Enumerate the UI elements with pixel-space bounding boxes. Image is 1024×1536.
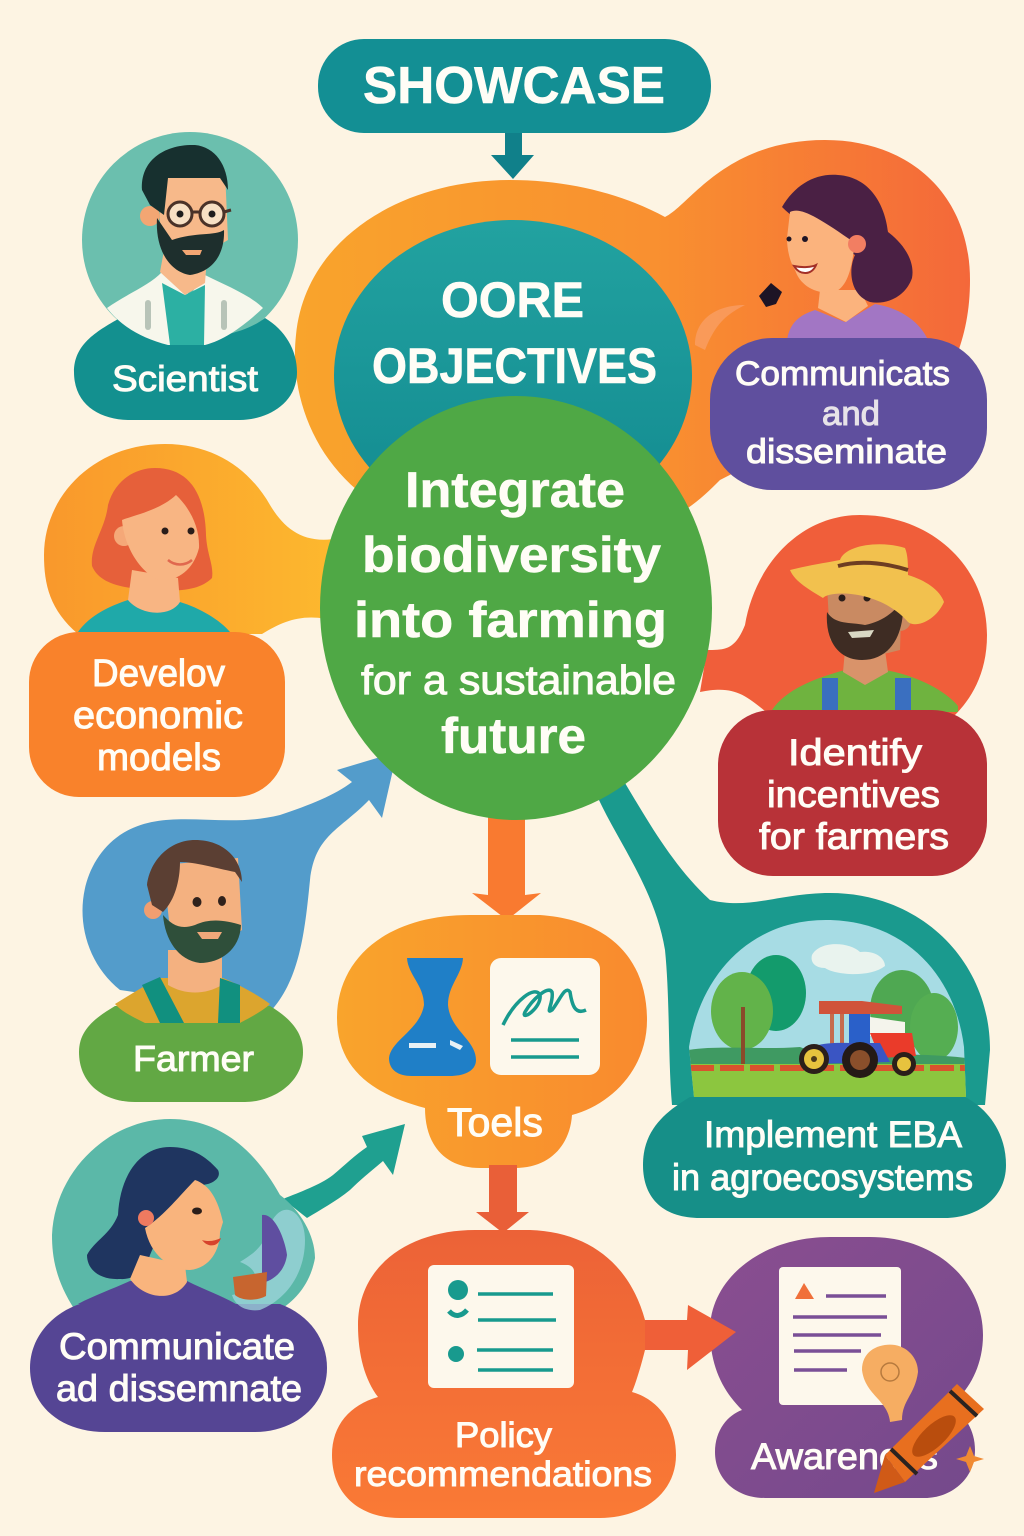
icon: farm scene with tractor: [689, 920, 966, 1097]
title: SHOWCASE: SHOWCASE: [363, 57, 665, 115]
icon: farmer in hat: [772, 544, 958, 712]
panel: core objectives circle: OORE: [441, 272, 584, 328]
icon: signed document: [490, 958, 600, 1075]
panel: awareness: [710, 1237, 984, 1498]
panel: farmer with straw hat: incentives: [767, 774, 940, 815]
icon: star: [956, 1446, 984, 1472]
panel: awareness: Awareness: [751, 1436, 938, 1477]
arrow: policy to awareness: [645, 1305, 736, 1370]
label: farmer: [79, 1006, 303, 1102]
panel: farmer with straw hat: [700, 515, 987, 876]
panel: scientist: Scientist: [112, 358, 258, 399]
panel: integrate biodiversity circle: for a sustainable: [361, 657, 676, 703]
icon: light bulb: [862, 1345, 918, 1422]
text box: communicate and disseminate, right: [710, 338, 987, 490]
panel: communicate and disseminate, left: ad dissemnate: [56, 1368, 302, 1409]
connector: communicate bubble and central ring: [295, 140, 970, 510]
panel: develop economic models: models: [97, 737, 221, 779]
arrow: title to core objectives: [491, 133, 534, 179]
text box: communicate and disseminate, right: disseminate: [746, 433, 947, 471]
swirl: [695, 305, 745, 350]
title: SHOWCASE: [318, 39, 711, 133]
panel: communicate and disseminate, left: Communicate: [59, 1326, 295, 1367]
panel: integrate biodiversity circle: Integrate: [405, 462, 625, 518]
panel: develop economic models: [29, 444, 340, 797]
panel: farmer with straw hat: for farmers: [759, 816, 949, 857]
label: scientist: [74, 318, 297, 420]
panel: scientist: [74, 132, 298, 420]
panel: integrate biodiversity circle: into farming: [354, 592, 667, 648]
text box: communicate and disseminate, right: Communicats: [735, 355, 950, 393]
panel: farmer with arrow: Farmer: [133, 1038, 254, 1079]
icon: scientist person: [107, 145, 263, 345]
panel: integrate biodiversity circle: [320, 396, 712, 920]
icon: blue flask: [389, 958, 476, 1076]
panel: policy recommendations: Policy: [455, 1416, 553, 1455]
text box: communicate and disseminate, right: and: [822, 395, 880, 433]
panel: implement EBA: [598, 783, 1006, 1218]
panel: integrate biodiversity circle: future: [441, 708, 586, 764]
panel: core objectives circle: [334, 220, 692, 530]
panel: integrate biodiversity circle: biodiversity: [362, 527, 661, 583]
panel: develop economic models: Develov: [92, 653, 225, 695]
panel: farmer with straw hat: Identify: [788, 732, 923, 773]
arrow: communicate to tools: [283, 1124, 405, 1218]
panel: core objectives circle: OBJECTIVES: [372, 338, 657, 394]
icon: bearded farmer: [115, 840, 270, 1023]
panel: tools: [337, 915, 647, 1168]
icon: crayon: [874, 1384, 984, 1493]
panel: farmer with arrow: [79, 752, 397, 1102]
panel: develop economic models: economic: [73, 695, 243, 737]
panel: implement EBA: in agroecosystems: [672, 1157, 973, 1198]
icon: speaking woman: [759, 175, 928, 340]
icon: awareness document: [779, 1267, 901, 1405]
panel: implement EBA: Implement EBA: [704, 1114, 962, 1155]
icon: woman with cup: [78, 1147, 305, 1310]
panel: communicate and disseminate, left: [30, 1119, 405, 1432]
icon: policy checklist: [428, 1265, 574, 1388]
panel: tools: Toels: [447, 1101, 543, 1145]
panel: policy recommendations: [332, 1165, 676, 1518]
panel: policy recommendations: recommendations: [354, 1455, 652, 1494]
icon: woman with red hair: [78, 468, 230, 632]
